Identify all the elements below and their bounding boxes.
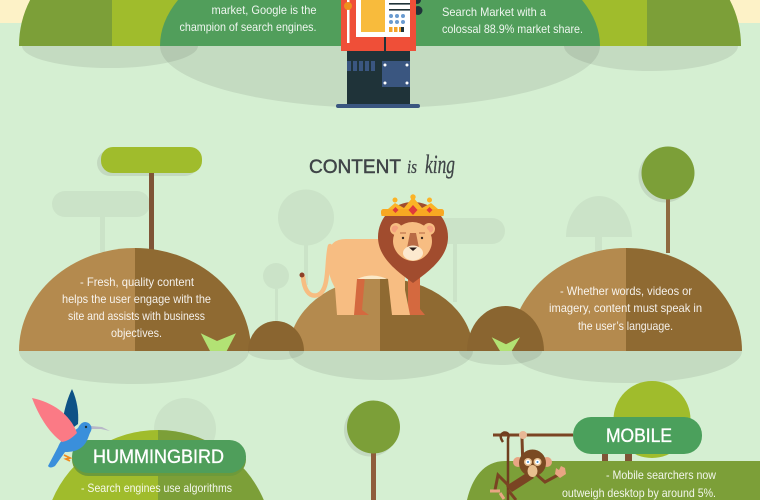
text: user's language: [549, 284, 702, 333]
small brown hills: [248, 306, 544, 351]
text: search algorithms: - Search engines use algorithms: [81, 481, 232, 495]
text: mobile searchers: outweigh desktop by around 5%.: [562, 486, 716, 500]
tree: lime flat canopy: [97, 147, 202, 252]
panel: search engine market hills: [19, 0, 741, 108]
text: fresh content: [62, 275, 211, 340]
text: search market share: colossal 88.9% market share.: [442, 22, 583, 36]
heading pill: hummingbird: [72, 440, 246, 476]
text: Google market: market, Google is the: [212, 3, 317, 17]
text: fresh content: helps the user engage with the: [62, 292, 211, 306]
text: mobile searchers: [562, 468, 716, 500]
hill shadows: [22, 46, 738, 108]
centre lion hill: [289, 278, 473, 351]
heading pill: mobile: MOBILE: [606, 426, 672, 447]
text: search market share: Search Market with a: [442, 5, 546, 19]
grass tufts: [201, 333, 520, 351]
heading pill: hummingbird: HUMMINGBIRD: [93, 447, 224, 468]
icon: search kiosk machine: [336, 0, 422, 108]
text: fresh content: objectives.: [111, 326, 162, 340]
right hill: [553, 0, 741, 46]
heading: content is king: CONTENT: [309, 157, 401, 178]
left brown hill: [19, 248, 251, 351]
text: search market share: [442, 5, 583, 36]
heading: content is king: [309, 150, 455, 179]
icon: hummingbird: [32, 389, 110, 468]
text: fresh content: - Fresh, quality content: [80, 275, 195, 289]
icon: lion with crown: [300, 194, 448, 315]
tree: centre round: [344, 400, 400, 500]
text: Google market: champion of search engines.: [180, 20, 316, 34]
heading: content is king: king: [425, 150, 455, 179]
panel: hummingbird hill: [52, 398, 264, 500]
heading: content is king: is: [407, 157, 417, 178]
lime hill: [52, 430, 264, 500]
text: user's language: imagery, content must speak in: [549, 301, 702, 315]
text: Google market: [180, 3, 317, 34]
tree: round green: [638, 146, 694, 253]
icon: monkey on branch: [490, 431, 573, 500]
heading pill: mobile: [573, 417, 702, 454]
right brown hill: [510, 248, 742, 351]
panel: content hills: [19, 248, 742, 384]
mobile ground: [467, 461, 760, 500]
hill shadows: [19, 351, 742, 384]
text: mobile searchers: - Mobile searchers now: [606, 468, 716, 482]
panel: mobile hill: [467, 381, 760, 500]
left hill: [19, 0, 205, 46]
text: fresh content: site and assists with business: [68, 309, 205, 323]
text: user's language: - Whether words, videos or: [560, 284, 692, 298]
central green hill: [160, 0, 600, 46]
text: user's language: the user’s language.: [578, 319, 673, 333]
background ghost trees: [52, 190, 632, 323]
